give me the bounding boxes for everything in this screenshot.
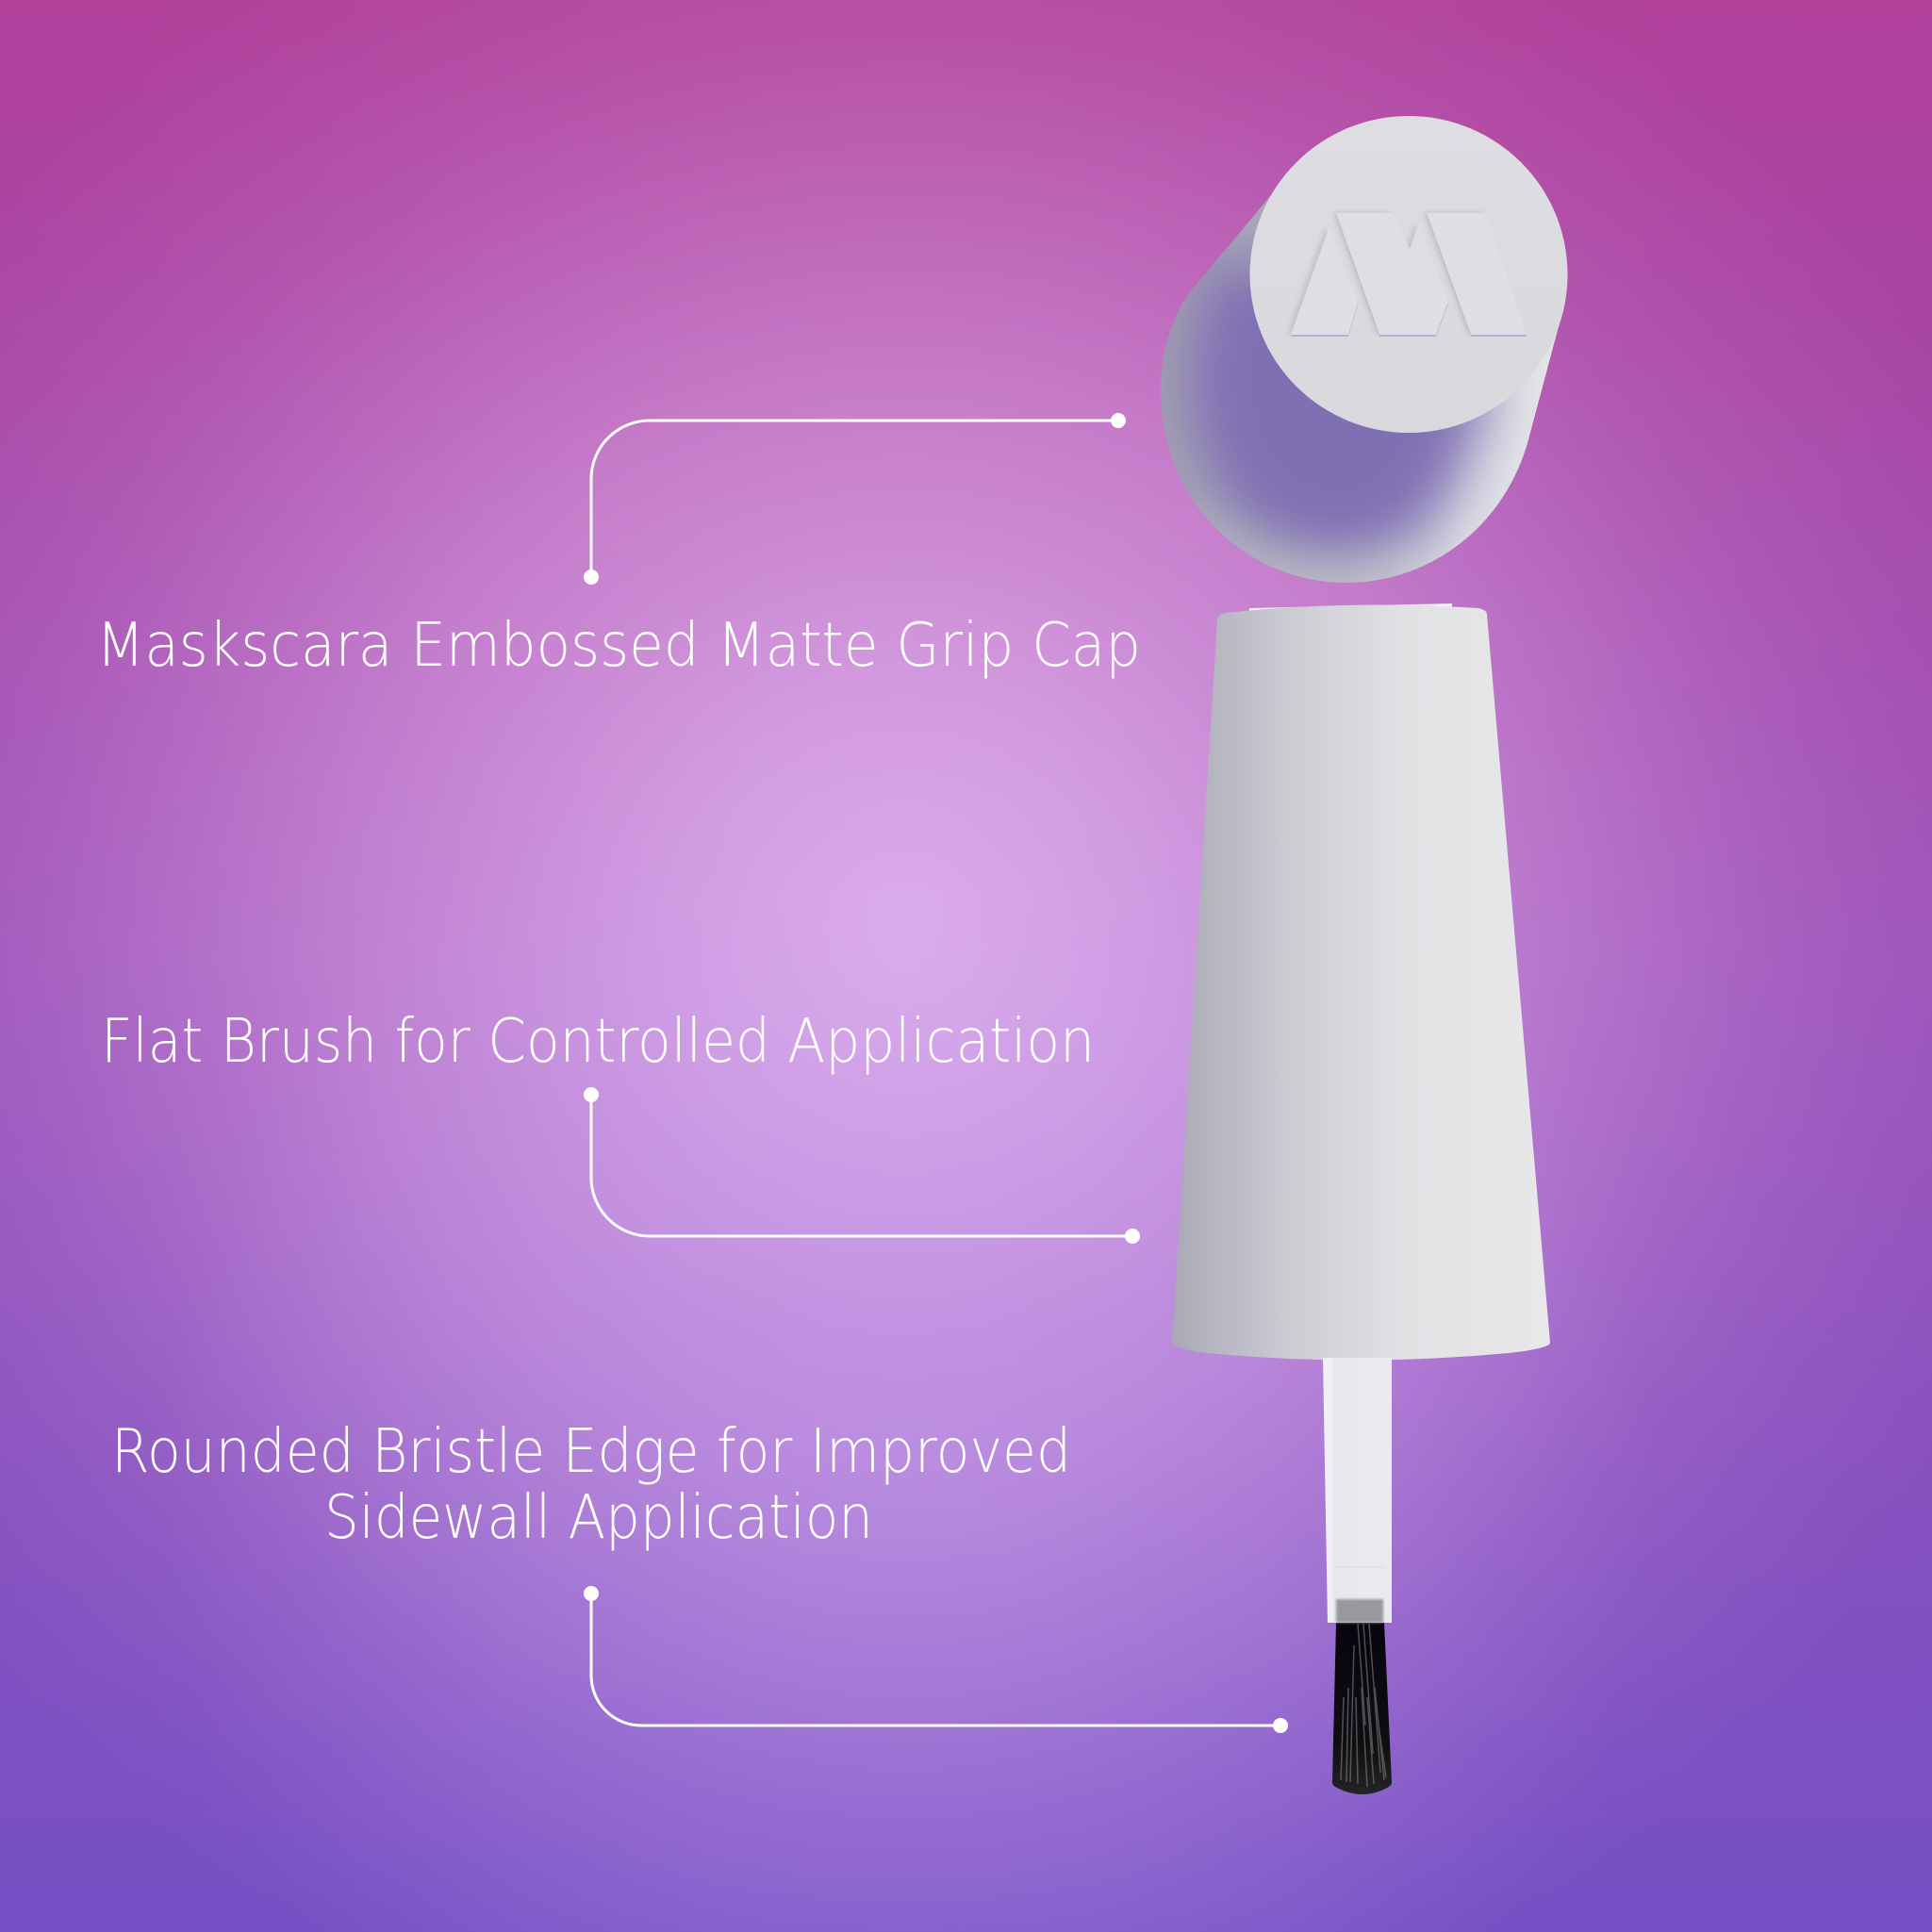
icon: brush stem bbox=[1323, 1358, 1392, 1623]
dot: bristle end bbox=[1273, 1718, 1288, 1733]
callout: cap bbox=[584, 413, 1126, 585]
label: rounded bristle edge: Sidewall Application bbox=[324, 1483, 873, 1553]
dot: flat brush body end bbox=[1125, 1229, 1140, 1244]
connector line: cap bbox=[591, 421, 1118, 577]
dot: bristle label end bbox=[584, 1586, 599, 1601]
icon: bristles bbox=[1332, 1623, 1392, 1794]
dot: flat brush label end bbox=[584, 1087, 599, 1102]
connector line: flat brush bbox=[591, 1094, 1132, 1236]
cap side bbox=[1161, 196, 1565, 583]
dot: cap label end bbox=[584, 570, 599, 585]
icon: bottle neck bbox=[1172, 603, 1550, 1360]
embossed logo bbox=[1287, 212, 1527, 337]
label: flat brush: Flat Brush for Controlled Application bbox=[101, 1007, 1095, 1077]
dot: cap end bbox=[1111, 413, 1126, 428]
callout: flat brush bbox=[584, 1087, 1140, 1244]
icon: cap bbox=[1160, 116, 1567, 632]
top ledge bbox=[1249, 603, 1452, 613]
cap top bbox=[1250, 116, 1567, 433]
connector line: bristle bbox=[591, 1593, 1280, 1726]
label: rounded bristle edge bbox=[111, 1417, 1071, 1553]
brush handle body bbox=[1172, 604, 1550, 1360]
label: cap: Maskscara Embossed Matte Grip Cap bbox=[96, 611, 1141, 681]
callout: rounded bristle edge bbox=[584, 1586, 1288, 1733]
label: rounded bristle edge: Rounded Bristle Edge for Improved bbox=[111, 1417, 1071, 1487]
